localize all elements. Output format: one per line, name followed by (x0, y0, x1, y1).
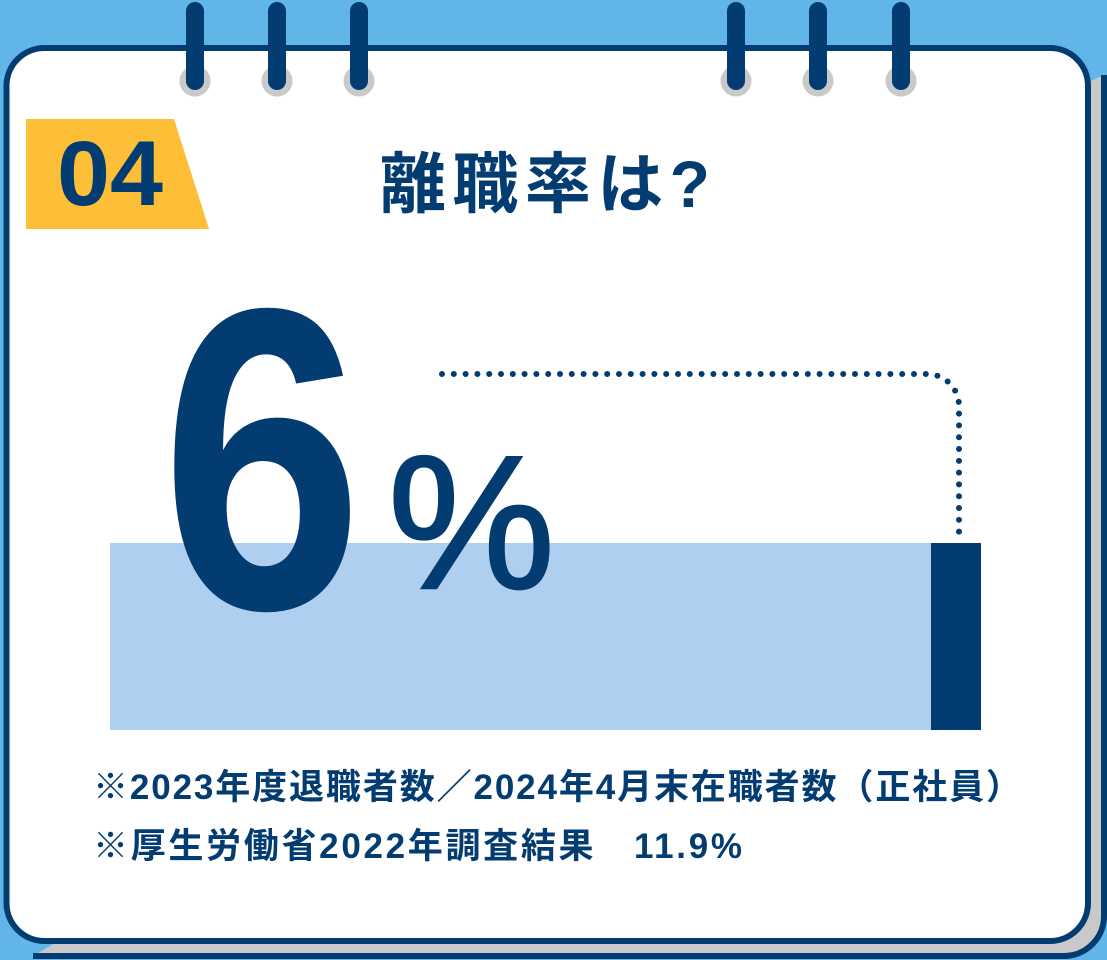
footnotes (93, 768, 1021, 866)
big value: 6% (161, 220, 555, 700)
footnotes: ※2023年度退職者数／2024年4月末在職者数（正社員） (93, 768, 1021, 807)
bar chart: 6 percent (110, 543, 981, 730)
big value: 6%: 6 (161, 220, 363, 700)
binder rings (180, 2, 916, 96)
number badge: 04 (57, 123, 163, 225)
number badge (26, 119, 209, 229)
big value: 6%: % (388, 417, 555, 629)
dotted leader line (442, 374, 959, 536)
title: 離職率は? (380, 147, 710, 221)
footnotes: ※厚生労働省2022年調査結果 11.9% (93, 827, 742, 866)
